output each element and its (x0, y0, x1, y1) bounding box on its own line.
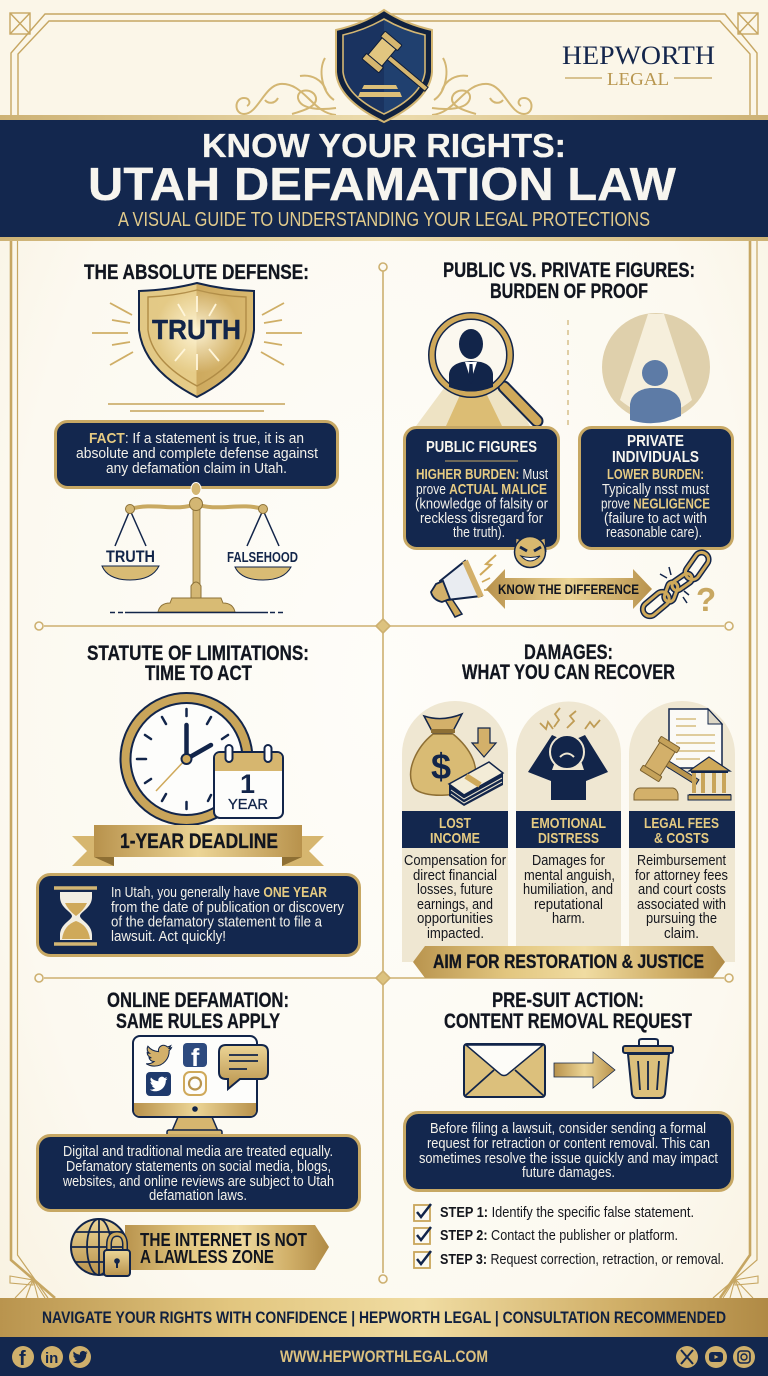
column: legal fees and costs (629, 701, 735, 962)
card: private individuals: reasonable care). (606, 525, 702, 541)
card: public figures: reckless disregard for (420, 511, 543, 527)
heading: SAME RULES APPLY (116, 1010, 280, 1033)
ribbon: 1-year deadline (72, 825, 324, 866)
callout: before filing: sometimes resolve the issue quickly and may impact (419, 1151, 718, 1167)
card: public figures: PUBLIC FIGURES (426, 439, 537, 456)
heading: THE ABSOLUTE DEFENSE: (84, 261, 309, 284)
logo: Hepworth Legal (562, 41, 715, 89)
step 3: STEP 3: Request correction, retraction, or removal. (440, 1252, 724, 1268)
card: public figures (404, 428, 558, 548)
column: lost income: LOST (439, 815, 471, 832)
column: emotional distress: reputational (534, 897, 603, 913)
icon: question mark: ? (696, 581, 716, 618)
card: private individuals: (failure to act with (604, 511, 707, 527)
callout: one year (38, 874, 360, 956)
column: legal fees and costs: pursuing the (646, 911, 717, 927)
callout: digital and traditional media: defamation laws. (149, 1188, 247, 1204)
arrow: know the difference (486, 569, 652, 609)
logo: Hepworth Legal: HEPWORTH (562, 41, 715, 70)
column: lost income: opportunities (417, 911, 493, 927)
icon: hourglass (54, 888, 97, 944)
heading (87, 642, 309, 685)
panel: public vs private figures (404, 259, 732, 619)
icon: money bag: $ (431, 746, 451, 787)
banner: the internet is not a lawless zone: A LAWLESS ZONE (140, 1247, 274, 1267)
heading: DAMAGES: (524, 641, 613, 664)
heading (444, 989, 692, 1033)
panel: statute of limitations (38, 642, 360, 956)
header flourishes (236, 58, 532, 115)
column: emotional distress: DISTRESS (538, 830, 599, 847)
callout: fact: absolute and complete defense against (76, 446, 318, 462)
heading: TIME TO ACT (145, 662, 252, 685)
heading: STATUTE OF LIMITATIONS: (87, 642, 309, 665)
title banner: KNOW YOUR RIGHTS: (202, 128, 566, 165)
icon: calendar one year: 1 (240, 769, 255, 799)
column: legal fees and costs: & COSTS (654, 830, 709, 847)
heading: BURDEN OF PROOF (490, 280, 648, 303)
icon: monitor with social icons (133, 1036, 268, 1136)
arrow: to trash (554, 1052, 615, 1088)
icon: broken chain (640, 550, 711, 619)
column: lost income: earnings, and (417, 897, 493, 913)
callout: fact (56, 422, 338, 488)
callout: digital and traditional media: websites, and online reviews are subject to Utah (62, 1174, 334, 1190)
social icons left: in (45, 1350, 58, 1367)
footer tagline band (0, 1298, 768, 1337)
website: WWW.HEPWORTHLEGAL.COM (280, 1347, 488, 1366)
icon: monitor with social icons: f (191, 1044, 200, 1072)
card: public figures: HIGHER BURDEN: Must (416, 467, 548, 483)
column: emotional distress: Damages for (532, 853, 605, 869)
banner: aim for restoration and justice (413, 946, 725, 978)
card: private individuals: prove NEGLIGENCE (601, 496, 710, 512)
column: legal fees and costs: for attorney fees (635, 868, 728, 884)
callout: fact: any defamation claim in Utah. (106, 461, 287, 477)
card: public figures: (knowledge of falsity or (415, 496, 548, 512)
icon: megaphone (431, 555, 496, 617)
icon: speech bubble (219, 1045, 268, 1089)
panel: damages (402, 641, 735, 978)
callout: fact: FACT: If a statement is true, it is an (89, 431, 304, 447)
card: private individuals: PRIVATE (627, 433, 684, 450)
icon: header shield with gavel (336, 10, 438, 122)
callout: digital and traditional media: Defamatory statements on social media, blogs, (66, 1159, 331, 1175)
callout: before filing (404, 1112, 732, 1190)
card: private individuals (580, 428, 732, 548)
card: private individuals: INDIVIDUALS (612, 449, 699, 466)
section dividers (35, 263, 733, 1283)
header background (0, 0, 768, 116)
social icons left (12, 1346, 91, 1370)
column: emotional distress: harm. (552, 911, 585, 927)
footer contact bar (0, 1337, 768, 1376)
logo: Hepworth Legal: LEGAL (607, 69, 669, 89)
icon: calendar one year (214, 745, 283, 818)
icon: clock (120, 693, 252, 825)
arrow: know the difference: KNOW THE DIFFERENCE (498, 581, 639, 597)
heading: CONTENT REMOVAL REQUEST (444, 1010, 692, 1033)
step 1: STEP 1: Identify the specific false statement. (440, 1205, 694, 1221)
icon: document gavel and courthouse (634, 709, 731, 800)
callout: one year: In Utah, you generally have ONE YEAR (111, 885, 327, 901)
icon: private individual spotlight (602, 313, 710, 423)
card: private individuals: LOWER BURDEN: (607, 467, 704, 483)
social icons right (676, 1346, 755, 1368)
column: legal fees and costs: and court costs (638, 882, 726, 898)
icon: devil emoji (514, 536, 546, 568)
heading: PRE-SUIT ACTION: (492, 989, 644, 1012)
card: private individuals: Typically nsst must (602, 482, 709, 498)
ribbon: 1-year deadline: 1-YEAR DEADLINE (120, 830, 278, 853)
icon: balance scales: FALSEHOOD (227, 550, 298, 566)
icon: calendar one year: YEAR (228, 796, 268, 813)
step 2: STEP 2: Contact the publisher or platform. (440, 1228, 678, 1244)
banner: the internet is not a lawless zone (125, 1225, 329, 1270)
column: lost income: losses, future (417, 882, 493, 898)
icon: money bag (411, 714, 503, 806)
column: legal fees and costs: associated with (637, 897, 726, 913)
callout: digital and traditional media (38, 1136, 360, 1210)
column: lost income (402, 701, 508, 962)
column: legal fees and costs: Reimbursement (637, 853, 726, 869)
column: legal fees and costs: LEGAL FEES (644, 815, 719, 832)
banner: the internet is not a lawless zone: THE INTERNET IS NOT (140, 1230, 307, 1250)
column: lost income: INCOME (430, 830, 480, 847)
column: legal fees and costs: claim. (664, 926, 699, 942)
heading: PUBLIC VS. PRIVATE FIGURES: (443, 259, 695, 282)
panel: pre-suit action (404, 989, 732, 1268)
icon: globe with lock (71, 1219, 130, 1276)
column: lost income: impacted. (427, 926, 484, 942)
callout: before filing: future damages. (522, 1165, 615, 1181)
column: emotional distress: mental anguish, (524, 868, 615, 884)
callout: one year: lawsuit. Act quickly! (111, 929, 226, 945)
column: emotional distress: EMOTIONAL (531, 815, 606, 832)
card: public figures: prove ACTUAL MALICE (416, 482, 547, 498)
card: public figures: the truth). (453, 525, 505, 541)
icon: truth shield (92, 283, 302, 397)
icon: distressed person (528, 708, 608, 800)
heading (107, 989, 289, 1033)
heading: ONLINE DEFAMATION: (107, 989, 289, 1012)
column: emotional distress: humiliation, and (523, 882, 613, 898)
social icons left: f (19, 1348, 26, 1370)
panel: online defamation (38, 989, 360, 1276)
icon: trash can (623, 1039, 673, 1098)
heading: WHAT YOU CAN RECOVER (462, 661, 675, 684)
checklist: steps (414, 1204, 724, 1268)
icon: balance scales (102, 482, 298, 612)
column: lost income: direct financial (413, 868, 497, 884)
panel: the absolute defense (56, 261, 338, 612)
icon: envelope (464, 1044, 545, 1097)
callout: before filing: Before filing a lawsuit, consider sending a formal (430, 1121, 706, 1137)
callout: one year: of the defamatory statement to file a (111, 914, 323, 930)
heading (462, 641, 675, 684)
column: lost income: Compensation for (404, 853, 506, 869)
callout: before filing: request for retraction or content removal. This can (427, 1136, 710, 1152)
icon: magnifier on public figure (416, 316, 537, 426)
callout: one year: from the date of publication or discovery (111, 900, 345, 916)
heading (443, 259, 695, 303)
callout: digital and traditional media: Digital and traditional media are treated equally. (63, 1144, 333, 1160)
title banner: UTAH DEFAMATION LAW (88, 158, 677, 210)
column: emotional distress (516, 702, 621, 962)
icon: truth shield: TRUTH (152, 314, 241, 345)
banner: aim for restoration and justice: AIM FOR RESTORATION & JUSTICE (433, 952, 704, 973)
title banner: A VISUAL GUIDE TO UNDERSTANDING YOUR LEGAL PROTECTIONS (118, 208, 650, 231)
title banner (0, 115, 768, 241)
icon: balance scales: TRUTH (106, 547, 155, 566)
